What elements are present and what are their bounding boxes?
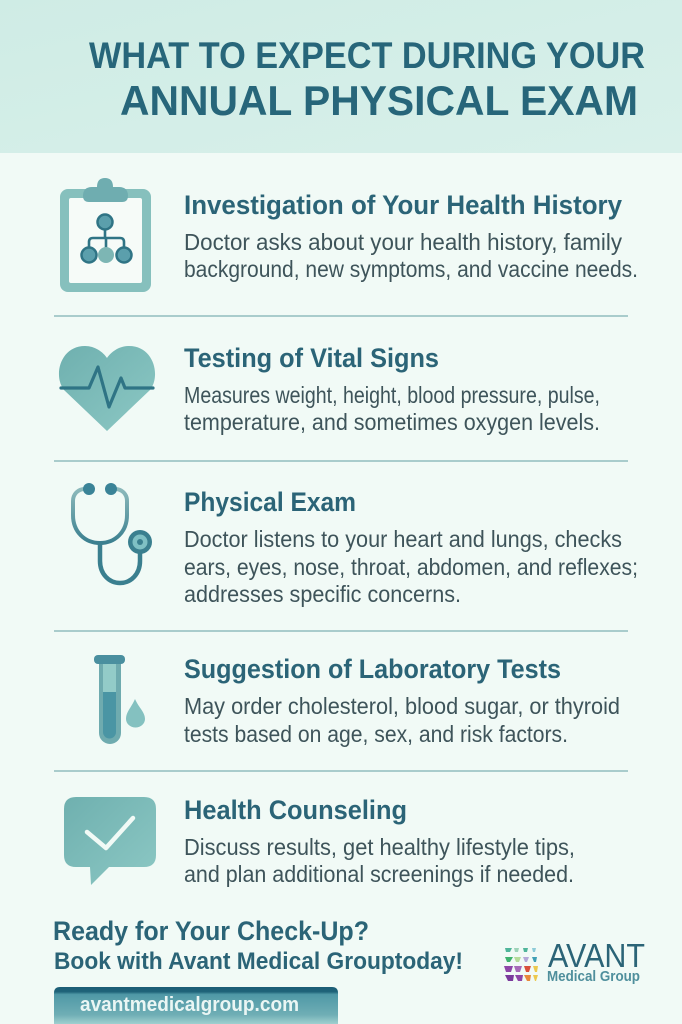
section 3 text: addresses specific concerns. <box>184 581 461 607</box>
call to action: Book with Avant Medical Grouptoday! <box>54 948 463 975</box>
icon: stethoscope <box>73 483 152 583</box>
section 3 text: Physical Exam <box>184 487 356 517</box>
section 3 text: ears, eyes, nose, throat, abdomen, and reflexes; <box>184 554 638 580</box>
section 2 text: temperature, and sometimes oxygen levels. <box>184 409 600 435</box>
logo: Avant Medical Group <box>504 937 645 985</box>
logo: Avant Medical Group: Medical Group <box>547 969 640 985</box>
section 4 text: May order cholesterol, blood sugar, or thyroid <box>184 693 620 719</box>
logo mark <box>504 948 538 981</box>
section 1 text: Investigation of Your Health History <box>184 190 622 220</box>
section 2 text: Testing of Vital Signs <box>184 343 439 373</box>
call to action <box>53 916 463 975</box>
header band <box>0 0 682 153</box>
section 5 text: Health Counseling <box>184 795 407 825</box>
section 3 text: Doctor listens to your heart and lungs, checks <box>184 526 622 552</box>
section 4 text: Suggestion of Laboratory Tests <box>184 654 561 684</box>
section 4 text: tests based on age, sex, and risk factors. <box>184 721 568 747</box>
title: WHAT TO EXPECT DURING YOUR <box>89 35 645 76</box>
button: website: avantmedicalgroup.com <box>80 994 299 1016</box>
title <box>89 35 645 124</box>
section 2 text <box>184 343 600 435</box>
icon: test tube and drop <box>94 655 145 744</box>
section 1 text: background, new symptoms, and vaccine needs. <box>184 256 638 282</box>
title: ANNUAL PHYSICAL EXAM <box>120 77 638 124</box>
section 2 text: Measures weight, height, blood pressure, pulse, <box>184 382 600 408</box>
section 1 text <box>184 190 638 282</box>
icon: clipboard with family tree <box>60 178 151 292</box>
icon: speech bubble with check <box>64 797 156 885</box>
icon: heart with pulse <box>59 346 155 431</box>
button: website <box>54 987 338 1024</box>
logo: Avant Medical Group: AVANT <box>548 937 645 974</box>
section 1 text: Doctor asks about your health history, family <box>184 229 622 255</box>
section 4 text <box>184 654 620 747</box>
section 5 text: Discuss results, get healthy lifestyle tips, <box>184 834 575 860</box>
section 5 text <box>184 795 575 887</box>
call to action: Ready for Your Check-Up? <box>53 916 369 946</box>
section 5 text: and plan additional screenings if needed. <box>184 861 574 887</box>
section 3 text <box>184 487 638 607</box>
